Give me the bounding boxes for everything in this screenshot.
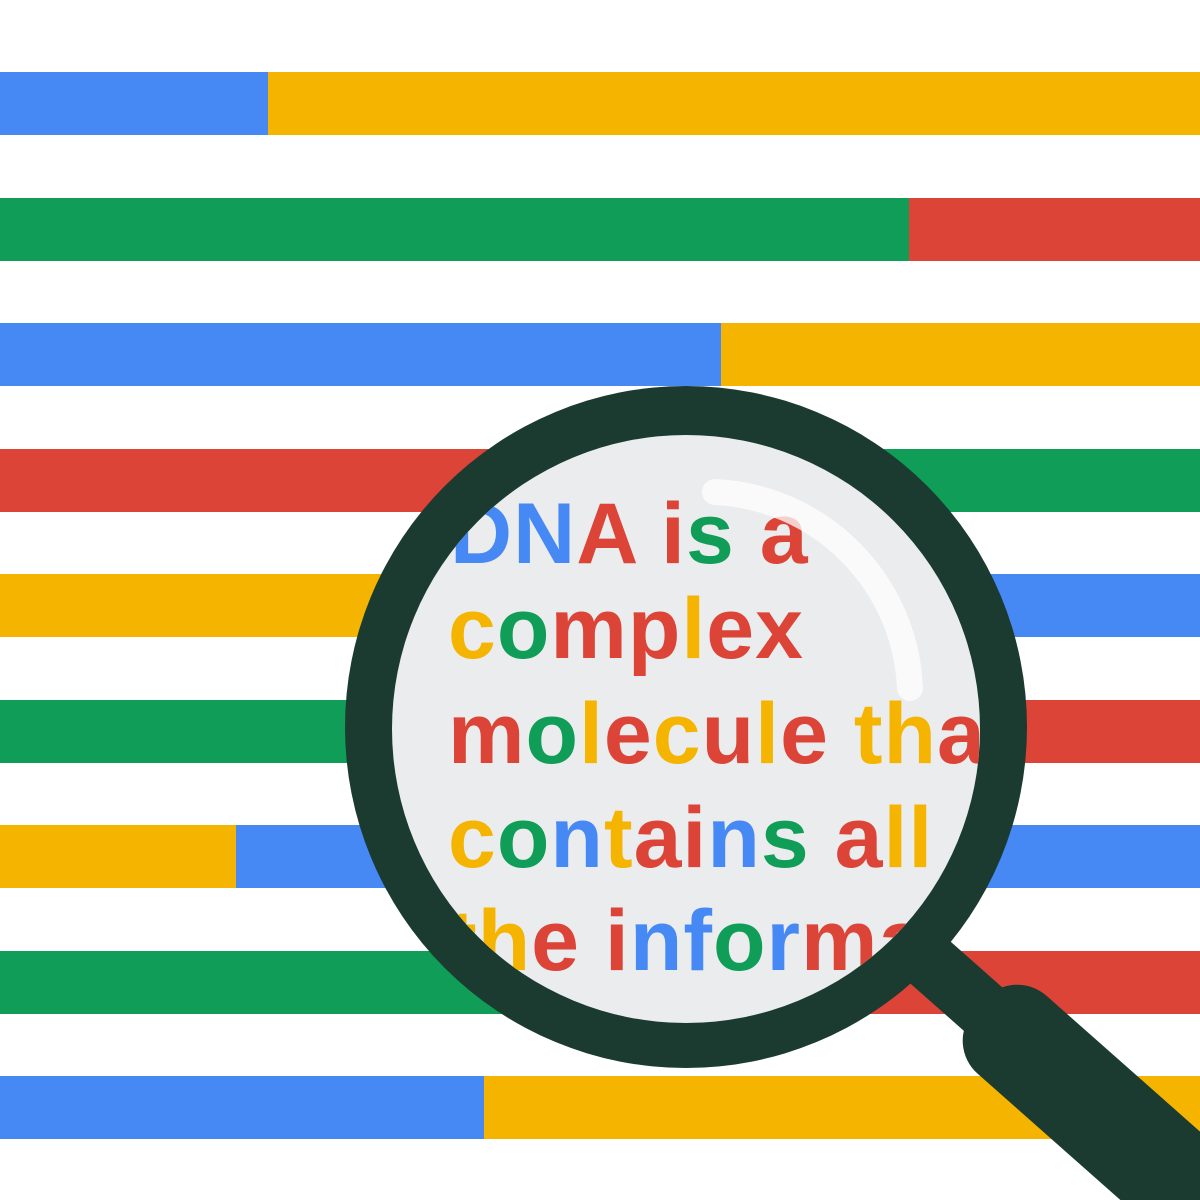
handle — [819, 855, 1200, 1200]
magnified text: complex — [448, 581, 804, 677]
magnifying glass — [345, 386, 1200, 1200]
magnified text: DNA is a — [450, 486, 809, 582]
magnified text: the information — [448, 893, 1089, 989]
magnified text: molecule that — [448, 686, 1015, 782]
glare highlight — [715, 492, 910, 688]
magnified text — [451, 500, 980, 971]
lens ring — [345, 386, 1027, 1068]
magnified text: contains all of — [448, 790, 1041, 886]
